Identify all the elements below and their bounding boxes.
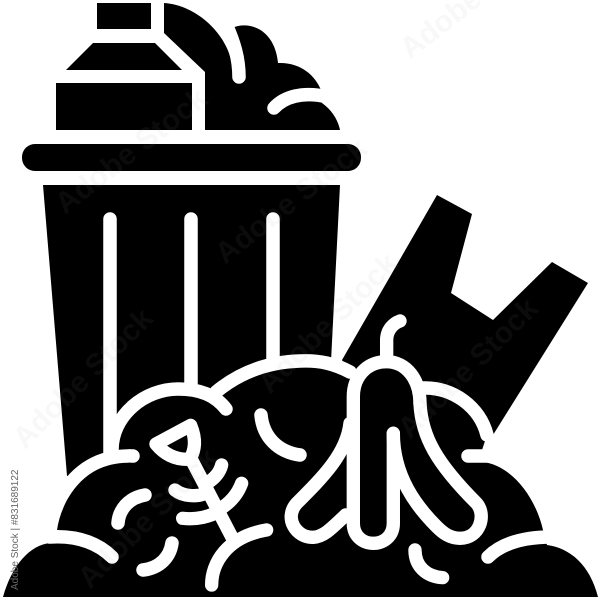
- icon: fish bone: [156, 425, 267, 585]
- watermark pattern: Adobe Stock: [7, 302, 160, 455]
- icon: leafy scraps: [164, 3, 340, 130]
- watermark pattern: Adobe Stock: [72, 442, 225, 595]
- icon: plastic bag: [342, 195, 588, 480]
- icon: garbage pile: [3, 321, 598, 597]
- watermark pattern: Adobe Stock: [49, 81, 214, 221]
- pile contour lines: [50, 361, 552, 570]
- watermark id label: Adobe Stock | #831689122: [10, 469, 21, 590]
- watermark pattern: Adobe Stock: [392, 292, 545, 445]
- watermark pattern: Adobe Stock: [209, 131, 374, 271]
- icon: bin lid: [22, 144, 361, 171]
- pile silhouette: [3, 361, 598, 597]
- watermark pattern: Adobe Stock: [252, 247, 405, 400]
- icon: milk carton: [56, 3, 192, 130]
- icon: banana peel: [291, 321, 481, 578]
- icon: bin body with slots: [43, 185, 340, 476]
